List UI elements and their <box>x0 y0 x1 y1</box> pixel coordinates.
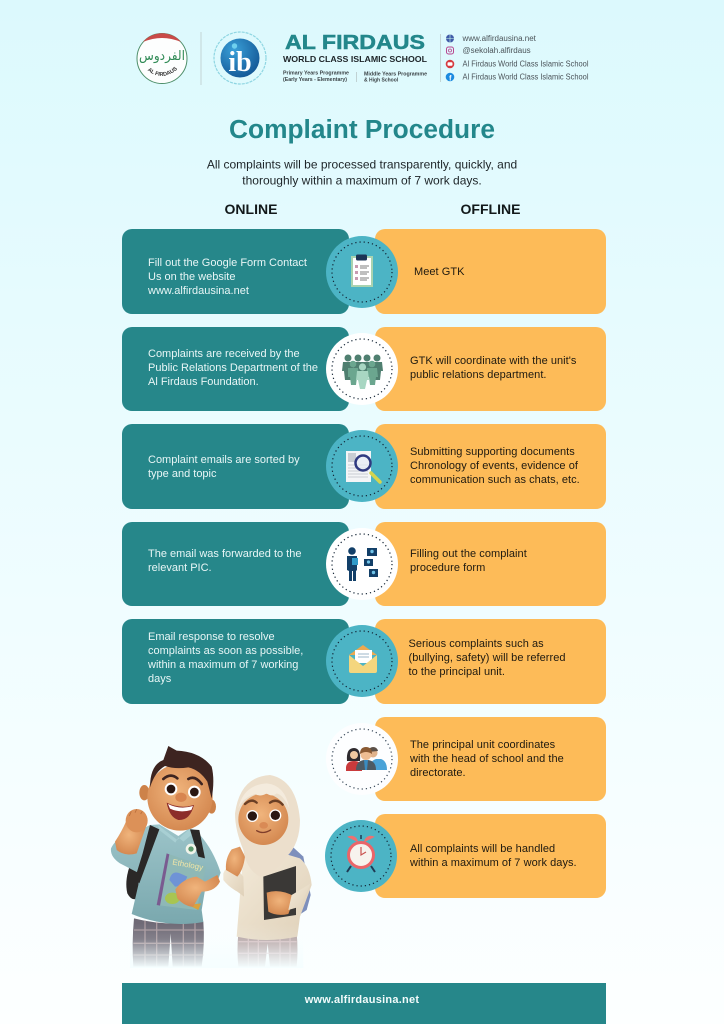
offline step 6: directorate. <box>410 767 466 779</box>
school name: Primary Years Programme <box>283 70 349 76</box>
online step 1: Fill out the Google Form Contact <box>148 257 307 269</box>
illustration: boy and girl students <box>111 746 312 968</box>
online step 2: Al Firdaus Foundation. <box>148 376 259 388</box>
contact list with social icons: Al Firdaus World Class Islamic School <box>462 72 589 82</box>
offline step 3 <box>375 424 606 509</box>
online step 2: Complaints are received by the <box>148 348 300 360</box>
school name: (Early Years - Elementary) <box>283 77 347 83</box>
offline step 4: procedure form <box>410 562 485 574</box>
offline step 4 <box>375 522 606 606</box>
school name: Middle Years Programme <box>364 72 427 78</box>
offline step 6: with the head of school and the <box>409 753 564 765</box>
online step 4 <box>122 522 349 606</box>
contact list with social icons <box>446 34 589 82</box>
title: Complaint Procedure <box>229 114 495 144</box>
logo: Al Firdaus: AL FIRDAUS <box>148 66 177 76</box>
online step 1 <box>122 229 349 314</box>
heading: offline: OFFLINE <box>461 201 520 217</box>
online step 1: www.alfirdausina.net <box>147 285 249 297</box>
girl <box>223 775 312 967</box>
online step 3: Complaint emails are sorted by <box>148 454 300 466</box>
offline step 5: (bullying, safety) will be referred <box>408 652 566 664</box>
offline step 7: within a maximum of 7 work days. <box>409 857 577 869</box>
subtitle <box>207 158 517 188</box>
offline step 5: Serious complaints such as <box>408 638 544 650</box>
online step 3: type and topic <box>148 468 217 480</box>
footer bar <box>122 983 606 1024</box>
school name <box>283 32 427 84</box>
online step 4: relevant PIC. <box>148 562 212 574</box>
online step 5: within a maximum of 7 working <box>147 659 298 671</box>
subtitle: All complaints will be processed transparently, quickly, and <box>207 158 517 172</box>
subtitle: thoroughly within a maximum of 7 work days. <box>242 174 482 188</box>
offline step 5 <box>375 619 606 704</box>
offline step 5: to the principal unit. <box>408 666 505 678</box>
heading: online: ONLINE <box>225 201 277 217</box>
pants fade <box>130 923 303 968</box>
offline step 3: Chronology of events, evidence of <box>410 460 579 472</box>
logo: Al Firdaus <box>136 33 188 84</box>
logo: Al Firdaus: الفردوس <box>139 49 185 64</box>
logo: IB world school <box>214 32 266 84</box>
contact list with social icons: @sekolah.alfirdaus <box>462 46 531 55</box>
online step 2: Public Relations Department of the <box>148 362 318 374</box>
online step 5: Email response to resolve <box>148 631 275 643</box>
online step 2 <box>122 327 349 411</box>
offline step 3: Submitting supporting documents <box>410 446 575 458</box>
offline step 2 <box>375 327 606 411</box>
online step 5: complaints as soon as possible, <box>148 645 303 657</box>
school name: & High School <box>364 78 399 84</box>
header: school logos and contacts <box>136 31 589 85</box>
offline step 2: public relations department. <box>410 369 547 381</box>
offline step 3: communication such as chats, etc. <box>410 474 580 486</box>
icon: envelope <box>326 625 398 697</box>
icon: document and magnifier <box>326 430 398 502</box>
offline step 6 <box>375 717 606 801</box>
offline step 6: The principal unit coordinates <box>410 739 556 751</box>
school name: AL FIRDAUS <box>285 32 425 54</box>
offline step 1 <box>375 229 606 314</box>
online step 1: Us on the website <box>148 271 235 283</box>
contact list with social icons: Al Firdaus World Class Islamic School <box>462 60 589 68</box>
online step 4: The email was forwarded to the <box>148 548 301 560</box>
boy <box>111 746 221 967</box>
icon: alarm clock <box>325 820 397 892</box>
icon: clipboard checklist <box>326 236 398 308</box>
offline step 2: GTK will coordinate with the unit's <box>410 355 577 367</box>
contact list with social icons: www.alfirdausina.net <box>462 34 537 43</box>
offline step 1: Meet GTK <box>414 266 465 278</box>
offline step 4: Filling out the complaint <box>410 548 527 560</box>
online step 3 <box>122 424 349 509</box>
logo: IB world school: ib <box>228 47 252 78</box>
online step 5 <box>122 619 349 704</box>
boy: Ethology <box>172 857 204 872</box>
offline step 7: All complaints will be handled <box>410 843 555 855</box>
online step 5: days <box>148 673 172 685</box>
icon: presenter with boards <box>326 528 398 600</box>
icon: three people <box>326 723 398 795</box>
contact list with social icons: f <box>449 75 452 82</box>
school name: WORLD CLASS ISLAMIC SCHOOL <box>283 54 427 64</box>
offline step 7 <box>375 814 606 898</box>
icon: group of people <box>326 333 398 405</box>
footer bar: www.alfirdausina.net <box>304 994 419 1006</box>
